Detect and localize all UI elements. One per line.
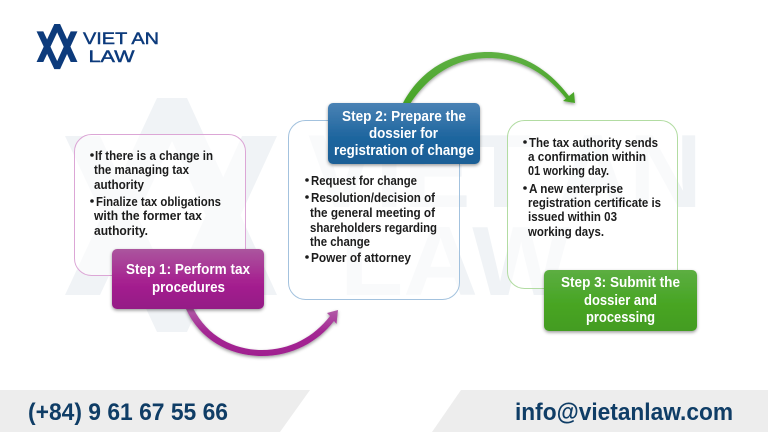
- watermark: logo and name: LAW: [340, 206, 571, 316]
- arrow: step 1 to step 2: [186, 308, 338, 356]
- watermark: logo and name: VIET AN: [308, 114, 702, 230]
- step 1 details text: with the former tax: [93, 208, 203, 223]
- step 3 details text: [523, 135, 661, 239]
- step 2 details text: the change: [310, 234, 370, 249]
- step 2 details text: Power of attorney: [311, 250, 412, 265]
- logo wordmark: [83, 29, 159, 66]
- panel: step 3: [508, 120, 697, 331]
- panel: step 1: [74, 134, 264, 309]
- footer: email: info@vietanlaw.com: [515, 399, 733, 426]
- logo: [37, 24, 159, 69]
- step 1 details text: If there is a change in: [95, 148, 213, 163]
- step 1 details text: Finalize tax obligations: [96, 194, 221, 209]
- step 1 details text: the managing tax: [94, 162, 190, 177]
- panel: step 2: [288, 103, 480, 300]
- step 3 details text: working days.: [527, 224, 604, 239]
- step 2 heading: [328, 103, 480, 164]
- step 1 heading: procedures: [152, 280, 225, 296]
- panel 3 outline: [508, 120, 678, 288]
- step 3 heading: Step 3: Submit the: [561, 275, 680, 291]
- footer: email: [432, 390, 768, 432]
- logo wordmark: LAW: [88, 47, 134, 66]
- step 2 details text: Resolution/decision of: [311, 190, 436, 205]
- step 3 heading: dossier and: [584, 293, 657, 309]
- panel 2 outline: [288, 120, 460, 300]
- step 3 heading: processing: [586, 310, 655, 326]
- step 3 details text: 01 working day.: [528, 163, 609, 178]
- step 1 details text: authority.: [94, 223, 148, 238]
- step 2 heading: dossier for: [369, 126, 438, 142]
- step 3 details text: issued within 03: [528, 209, 617, 224]
- step 1 heading: Step 1: Perform tax: [126, 262, 250, 278]
- step 3 details text: a confirmation within: [528, 149, 646, 164]
- step 1 details text: authority: [94, 177, 145, 192]
- logo wordmark: VIET AN: [83, 29, 159, 48]
- watermark: logo and name: [65, 98, 702, 332]
- step 1 heading: [112, 249, 264, 309]
- step 3 heading: [544, 270, 697, 331]
- footer: phone: [0, 390, 310, 432]
- step 2 details text: the general meeting of: [310, 205, 436, 220]
- step 2 heading: Step 2: Prepare the: [342, 109, 466, 125]
- step 2 details text: shareholders regarding: [310, 220, 437, 235]
- icon: logo mark: [37, 24, 77, 69]
- step 1 details text: [90, 148, 221, 238]
- footer: phone: (+84) 9 61 67 55 66: [28, 399, 228, 426]
- step 3 details text: A new enterprise: [529, 181, 623, 196]
- step 3 details text: The tax authority sends: [529, 135, 658, 150]
- step 3 details text: registration certificate is: [528, 195, 661, 210]
- step 2 heading: registration of change: [334, 143, 474, 159]
- step 2 details text: Request for change: [311, 173, 417, 188]
- arrow: step 2 to step 3: [403, 52, 575, 104]
- panel 1 outline: [74, 134, 246, 276]
- step 2 details text: [305, 173, 437, 265]
